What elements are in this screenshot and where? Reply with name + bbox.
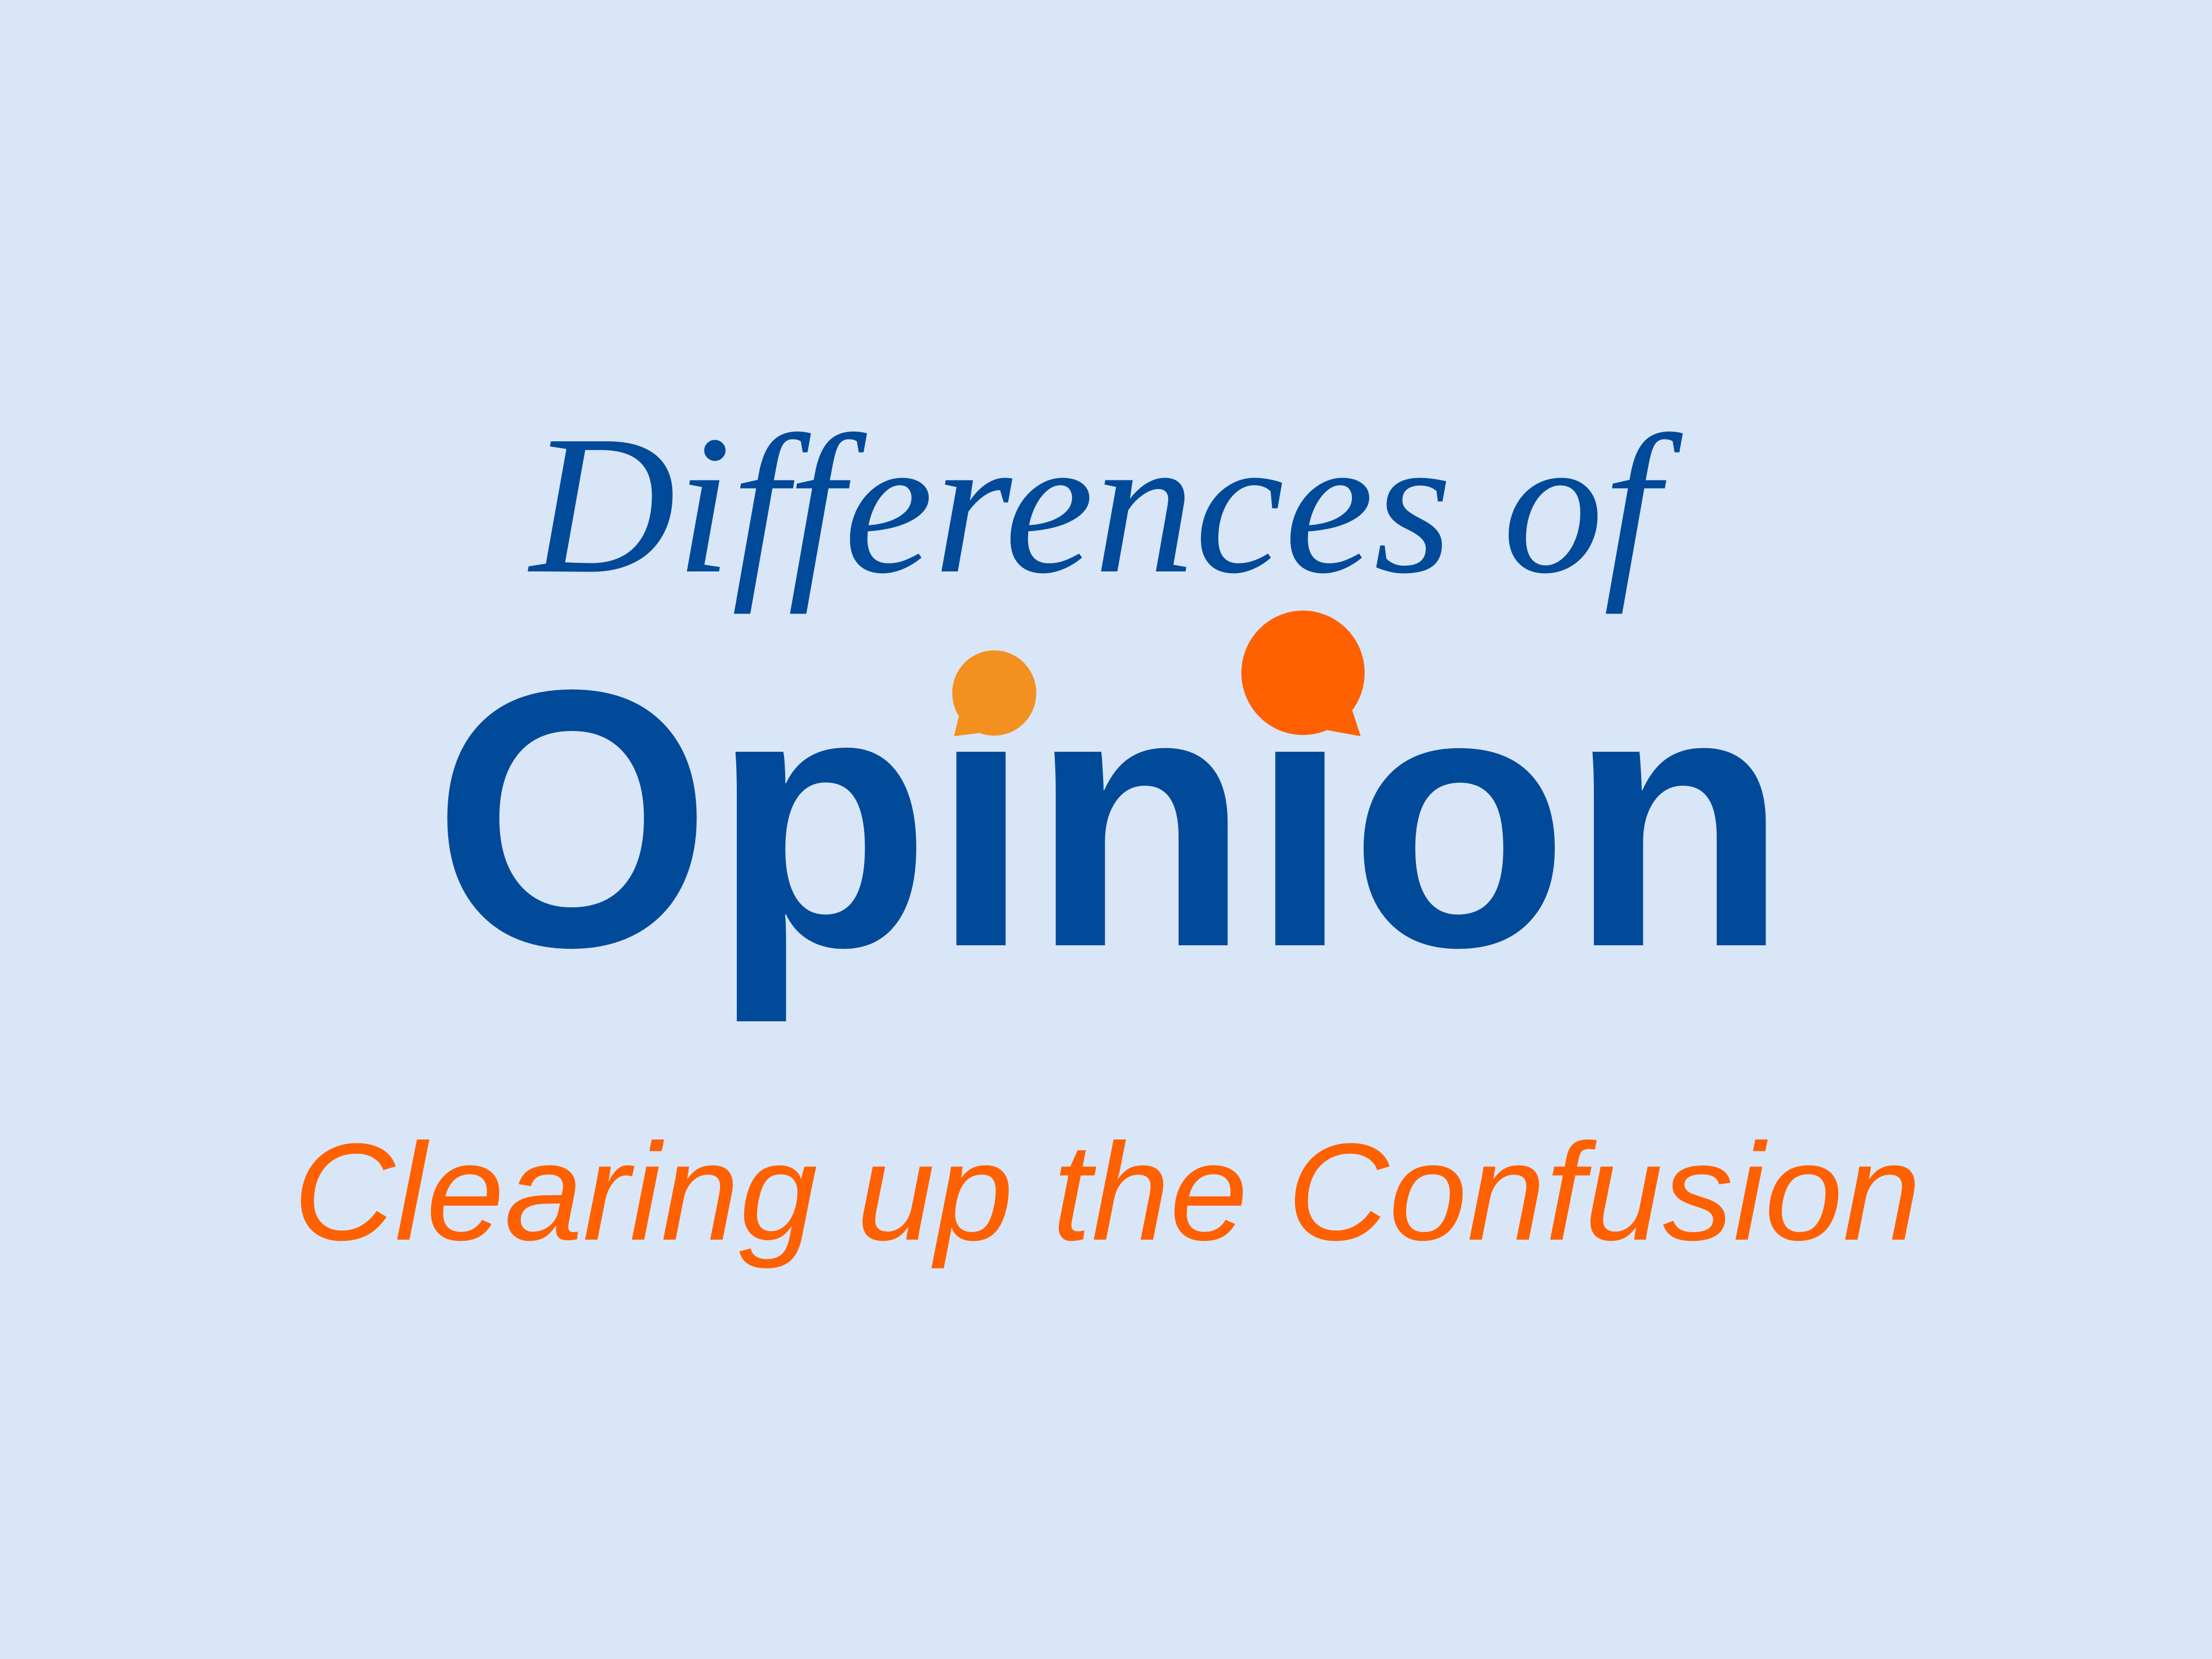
subtitle: Clearing up the Confusion <box>293 1115 1921 1269</box>
icon: small speech bubble <box>952 650 1036 736</box>
icon: large speech bubble <box>1241 611 1365 736</box>
title: Opinion: Opınıon <box>433 613 1788 1025</box>
title: Differences of: Differences of <box>527 395 1685 615</box>
